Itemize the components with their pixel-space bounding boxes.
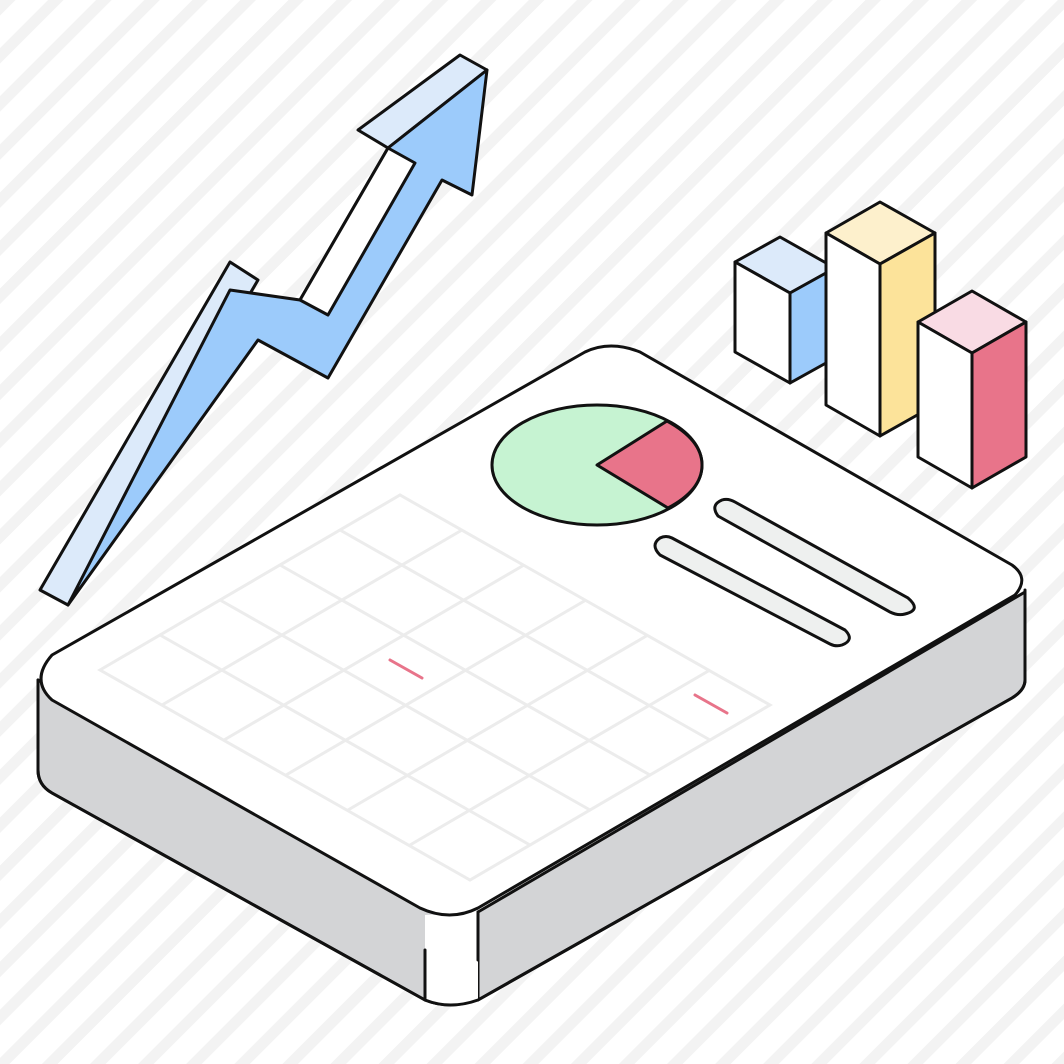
yellow bar bbox=[826, 202, 935, 436]
pie chart bbox=[492, 405, 702, 525]
faint grid table bbox=[100, 495, 770, 880]
pink bar bbox=[918, 291, 1026, 488]
bar chart: three isometric bars bbox=[735, 202, 1026, 488]
board top face bbox=[41, 346, 1022, 915]
board right side bbox=[478, 592, 1025, 1000]
text lines (pills) bbox=[655, 499, 914, 646]
pink markers bbox=[390, 660, 727, 713]
rising arrow bbox=[40, 55, 487, 605]
board left side bbox=[38, 680, 475, 1005]
board: document base bbox=[38, 346, 1025, 1006]
blue bar bbox=[735, 237, 835, 383]
